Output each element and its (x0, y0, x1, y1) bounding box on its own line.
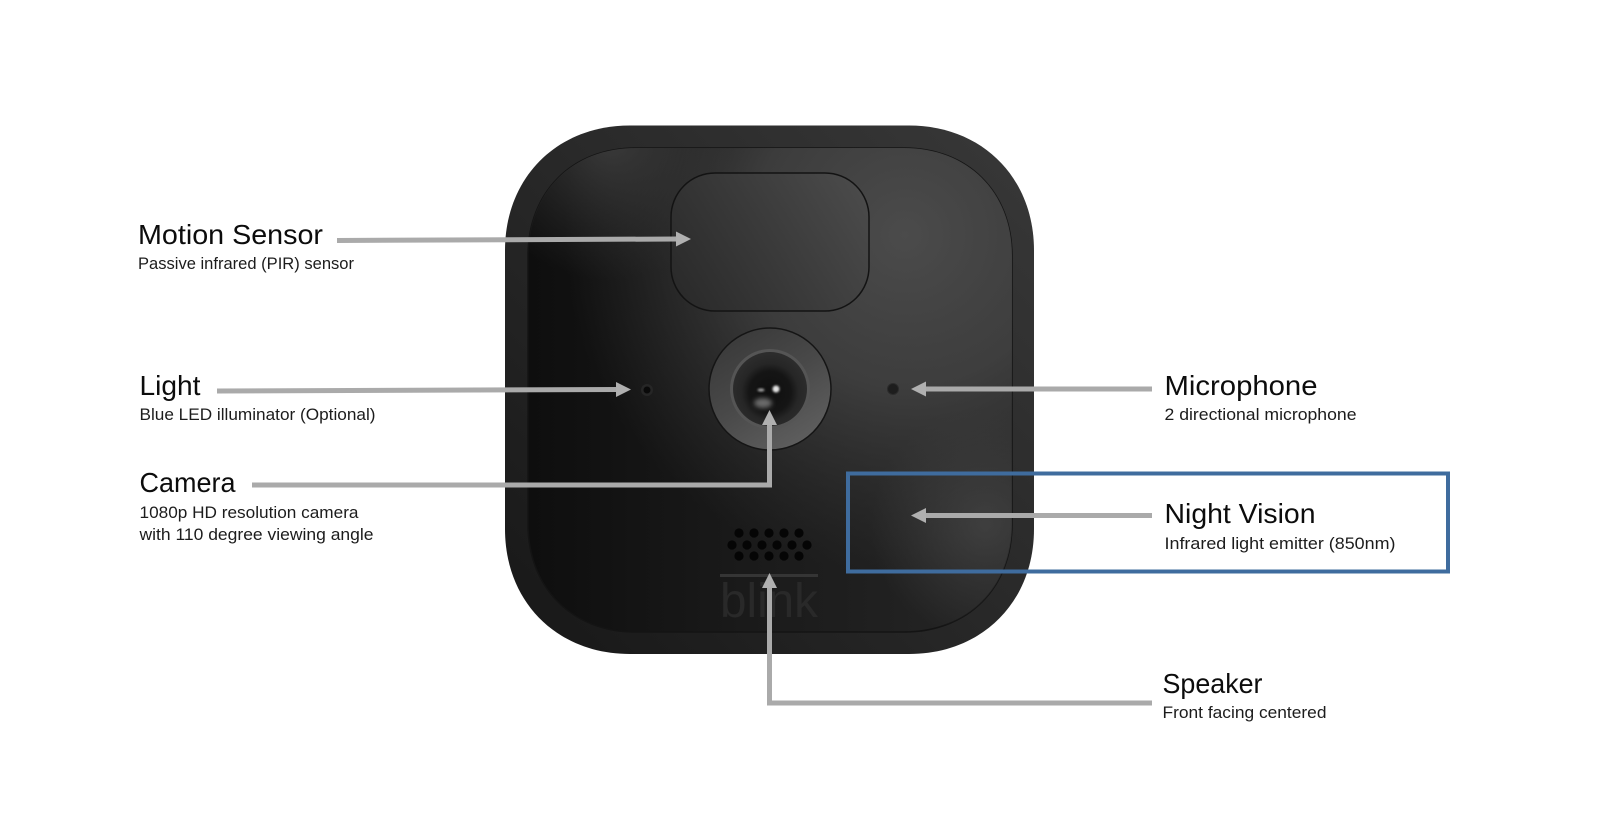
label: speaker: Speaker (1162, 668, 1262, 699)
label: camera (138, 467, 374, 544)
motion sensor window (671, 173, 869, 311)
arrow: microphone (911, 382, 1152, 396)
label: microphone: 2 directional microphone (1164, 405, 1356, 424)
speaker grille (727, 528, 812, 561)
label: speaker: Front facing centered (1162, 703, 1326, 722)
label: night vision: Night Vision (1164, 498, 1316, 529)
label: light: Light (140, 370, 201, 401)
blink logo: blink (720, 575, 819, 628)
label: camera: with 110 degree viewing angle (138, 525, 374, 544)
label: light: Blue LED illuminator (Optional) (140, 405, 376, 424)
camera front face (528, 148, 1012, 632)
camera outer shell (505, 126, 1034, 654)
label: night vision (1164, 498, 1396, 553)
LED light dot (641, 384, 653, 396)
label: speaker (1162, 668, 1326, 722)
camera device (505, 126, 1034, 654)
label: night vision: Infrared light emitter (850nm) (1164, 534, 1396, 553)
label: microphone (1164, 370, 1356, 424)
microphone dot (888, 384, 898, 394)
arrow: light (217, 382, 631, 397)
arrow: camera (252, 410, 777, 485)
label: camera: 1080p HD resolution camera (140, 503, 359, 522)
camera lens (709, 328, 831, 450)
label: motion sensor (138, 219, 354, 273)
label: camera: Camera (140, 467, 236, 498)
night vision highlight box (848, 474, 1448, 572)
label: microphone: Microphone (1164, 370, 1318, 401)
label: motion sensor: Passive infrared (PIR) sensor (138, 254, 354, 273)
label: light (140, 370, 376, 424)
label: motion sensor: Motion Sensor (138, 219, 323, 250)
arrow: night vision (911, 508, 1152, 523)
arrow: motion sensor (337, 232, 691, 246)
arrow: speaker (762, 573, 1152, 703)
